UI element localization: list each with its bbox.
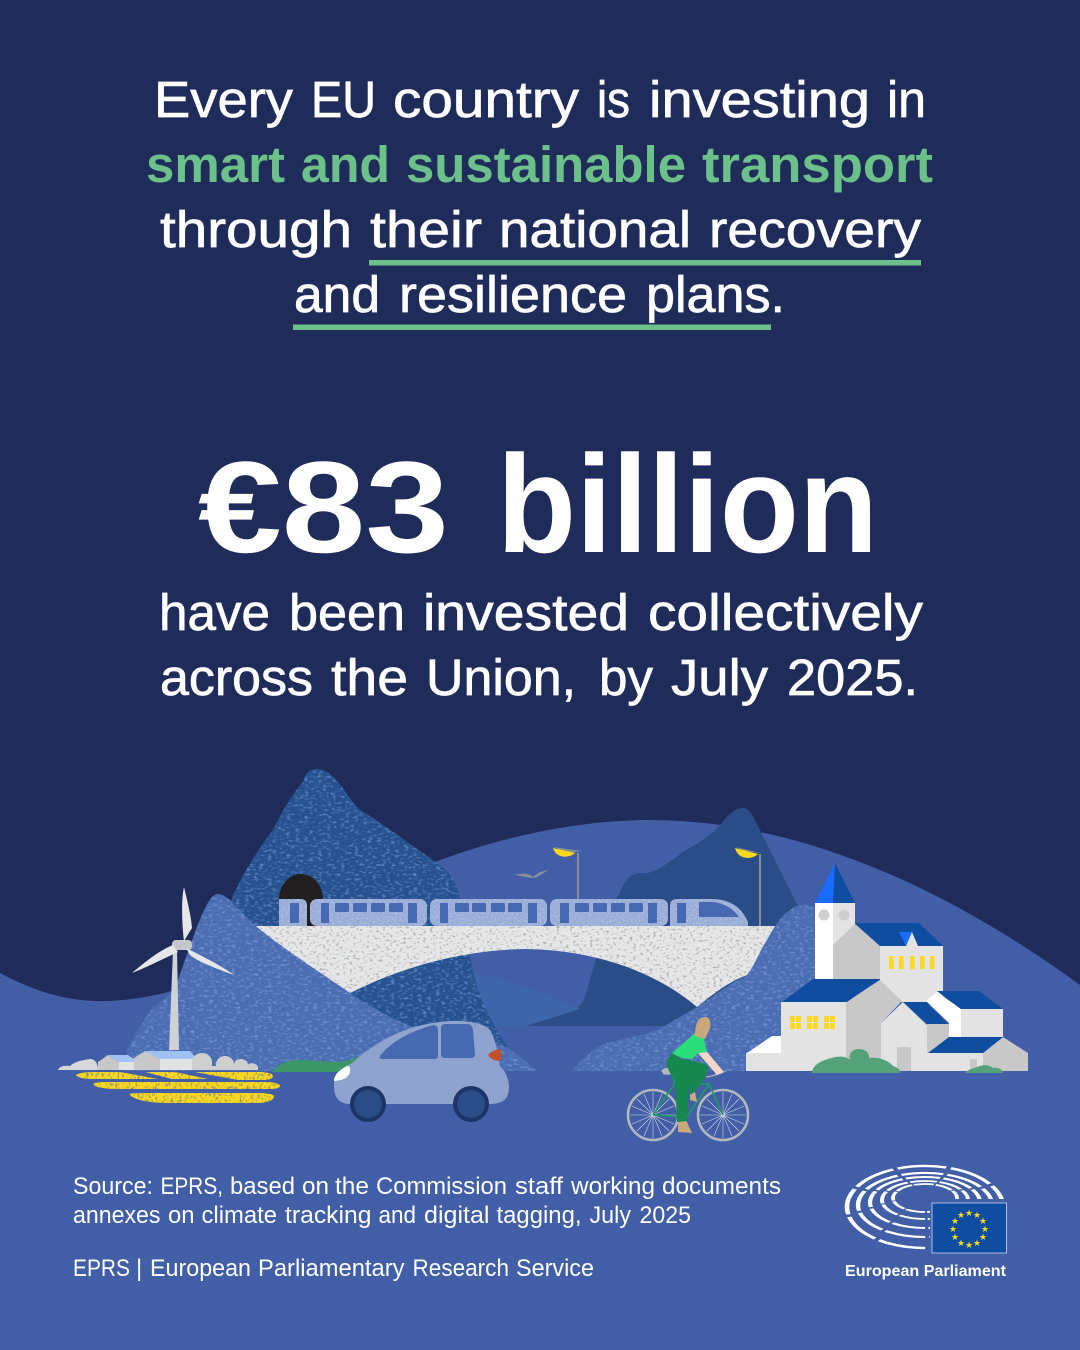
flag stars: ★ [973, 1238, 981, 1248]
tall textured mountain [200, 769, 510, 1071]
underline for line 3 [369, 260, 921, 266]
publisher line: EPRS [73, 1255, 130, 1282]
lower hall roof [782, 979, 880, 1002]
subheading line 2: 2025. [787, 649, 918, 706]
rider near foot [678, 1120, 692, 1133]
heading line 3: national [499, 201, 691, 258]
wind turbine [132, 887, 234, 1050]
flag stars: ★ [957, 1210, 965, 1220]
train [279, 899, 748, 926]
subheading line 2: July [671, 649, 769, 706]
source line 1: Commission [376, 1173, 507, 1200]
source line 2: and [378, 1202, 416, 1229]
publisher line [73, 1255, 594, 1282]
rider far foot [690, 1092, 697, 1102]
heading line 4 [294, 266, 785, 323]
centre house [881, 1002, 949, 1071]
subheading line 1: collectively [648, 584, 924, 641]
heading line 1: Every [154, 71, 294, 128]
logo wordmark: European Parliament [845, 1263, 1007, 1280]
bicycle frame [653, 1075, 723, 1117]
round shrubs right [192, 1053, 258, 1070]
subheading line 2 [160, 649, 918, 706]
right wing roof [937, 991, 1003, 1009]
left annex [746, 1036, 782, 1071]
nave gable [833, 924, 880, 979]
source line 2: tagging, [496, 1202, 582, 1229]
lower hall windows [790, 1016, 835, 1029]
source line 1: the [335, 1173, 369, 1200]
rider arm [698, 1052, 724, 1075]
distant dark mountain [526, 808, 800, 1026]
flag margin [930, 1199, 1012, 1259]
publisher line: | [136, 1255, 142, 1282]
source line 2: 2025 [640, 1202, 691, 1229]
street lamp left [553, 847, 582, 900]
source line 1: staff [515, 1173, 563, 1200]
illustration: landscape with transport [58, 769, 1028, 1140]
subheading line 2: across [160, 649, 313, 706]
large bush [812, 1049, 900, 1073]
heading line 1: is [597, 71, 630, 128]
heading line 2: green highlight: smart [146, 136, 285, 193]
lower hall front wall [781, 1002, 846, 1071]
small house [98, 1055, 138, 1070]
heading line 1: country [393, 71, 580, 128]
train car 4 [550, 899, 668, 926]
source line 2 [73, 1202, 691, 1229]
left hamlet on the shore [58, 1051, 258, 1070]
main blue roof [855, 923, 943, 946]
rider hair [695, 1017, 710, 1039]
dormer [899, 932, 918, 946]
source line 1: on [302, 1173, 329, 1200]
flag stars: ★ [949, 1224, 957, 1234]
publisher line: Parliamentary [258, 1255, 404, 1282]
car tail light [488, 1049, 502, 1061]
European Parliament logo [845, 1166, 1012, 1280]
publisher line: Service [516, 1255, 594, 1282]
source line 2: climate [202, 1202, 277, 1229]
big figure: 83 billion euros [198, 427, 878, 582]
heading line 4: and [294, 266, 380, 323]
street lamp right [735, 847, 761, 926]
heading line 1 [154, 71, 926, 128]
subheading line 1: invested [423, 584, 629, 641]
flag stars: ★ [981, 1224, 989, 1234]
stone arch bridge [250, 926, 775, 1007]
church village [746, 863, 1028, 1073]
yellow fields [76, 1072, 280, 1103]
upper windows [889, 956, 934, 969]
lower right house [927, 1037, 1028, 1071]
hemicycle rings [847, 1166, 1003, 1248]
bird [515, 870, 549, 878]
heading line 3: through [160, 201, 352, 258]
flag stars: ★ [951, 1232, 959, 1242]
flag stars: ★ [973, 1210, 981, 1220]
heading line 1: EU [311, 71, 376, 128]
source line 2: July [590, 1202, 631, 1229]
right wing wall [961, 1009, 1003, 1037]
heading line 4: resilience [399, 266, 627, 323]
front left textured mountain [125, 894, 538, 1071]
lighter hill behind the bridge [470, 973, 580, 1026]
heading line 3: their [370, 201, 482, 258]
tower [815, 863, 855, 979]
subheading line 1 [159, 584, 924, 641]
source line 1: documents [662, 1173, 781, 1200]
small bush [965, 1065, 1003, 1073]
subheading line 1: have [159, 584, 270, 641]
heading line 2: green highlight: sustainable [406, 136, 686, 193]
car rear wheel [453, 1086, 489, 1122]
green hill by the car [272, 1048, 400, 1072]
ground: rolling blue hill [0, 820, 1080, 1350]
large house [134, 1051, 197, 1070]
big figure: 83 billion euros: €83 [198, 434, 449, 580]
subheading line 2: by [599, 649, 653, 706]
subheading line 1: been [289, 584, 405, 641]
heading line 2: green highlight: and [301, 136, 390, 193]
subheading [159, 584, 924, 706]
right textured mountain [572, 905, 820, 1071]
saddle and handlebar [662, 1068, 726, 1077]
source line 1: based [230, 1173, 295, 1200]
subheading line 2: Union, [426, 649, 576, 706]
flag stars: ★ [951, 1216, 959, 1226]
heading line 4: plans. [646, 266, 785, 323]
publisher line: Research [412, 1255, 509, 1282]
flag stars: ★ [979, 1216, 987, 1226]
big figure: 83 billion euros: billion [497, 427, 878, 582]
heading line 1: investing [649, 71, 870, 128]
flag stars: ★ [957, 1238, 965, 1248]
train car 2 [310, 899, 427, 926]
car headlight [334, 1066, 350, 1081]
heading line 3 [160, 201, 922, 258]
heading line 2: green highlight [146, 136, 933, 193]
heading line 1: in [887, 71, 926, 128]
source line 2: digital [424, 1202, 490, 1229]
car front wheel [350, 1086, 386, 1122]
source line 1: working [570, 1173, 655, 1200]
underline for line 4 [293, 324, 771, 330]
flag stars [949, 1208, 989, 1250]
heading line 3: recovery [709, 201, 922, 258]
car windows [380, 1025, 438, 1059]
source text [73, 1173, 781, 1282]
source line 1 [73, 1173, 781, 1200]
flag stars: ★ [965, 1208, 973, 1218]
subheading line 2: the [331, 649, 408, 706]
train car 3 [430, 899, 547, 926]
heading line 2: green highlight: transport [702, 136, 933, 193]
flag stars: ★ [979, 1232, 987, 1242]
rider trousers [667, 1053, 708, 1122]
heading [146, 71, 933, 330]
car [334, 1021, 509, 1122]
white strip of right wing [926, 992, 961, 1037]
source line 1: EPRS, [160, 1173, 223, 1200]
publisher line: European [150, 1255, 251, 1282]
flag stars: ★ [965, 1240, 973, 1250]
source line 1: Source: [73, 1173, 153, 1200]
upper facade [880, 946, 943, 1002]
source line 2: tracking [285, 1202, 372, 1229]
train locomotive [670, 899, 748, 926]
tunnel entrance [279, 874, 323, 926]
bicycle wheels [628, 1090, 748, 1140]
source line 2: on [168, 1202, 194, 1229]
EU flag [932, 1203, 1006, 1253]
source line 2: annexes [73, 1202, 160, 1229]
lower hall side [846, 980, 902, 1071]
cyclist [628, 1017, 748, 1140]
rider shirt [672, 1033, 707, 1059]
train car 1 [279, 899, 307, 926]
textured shrubs left [58, 1059, 98, 1070]
